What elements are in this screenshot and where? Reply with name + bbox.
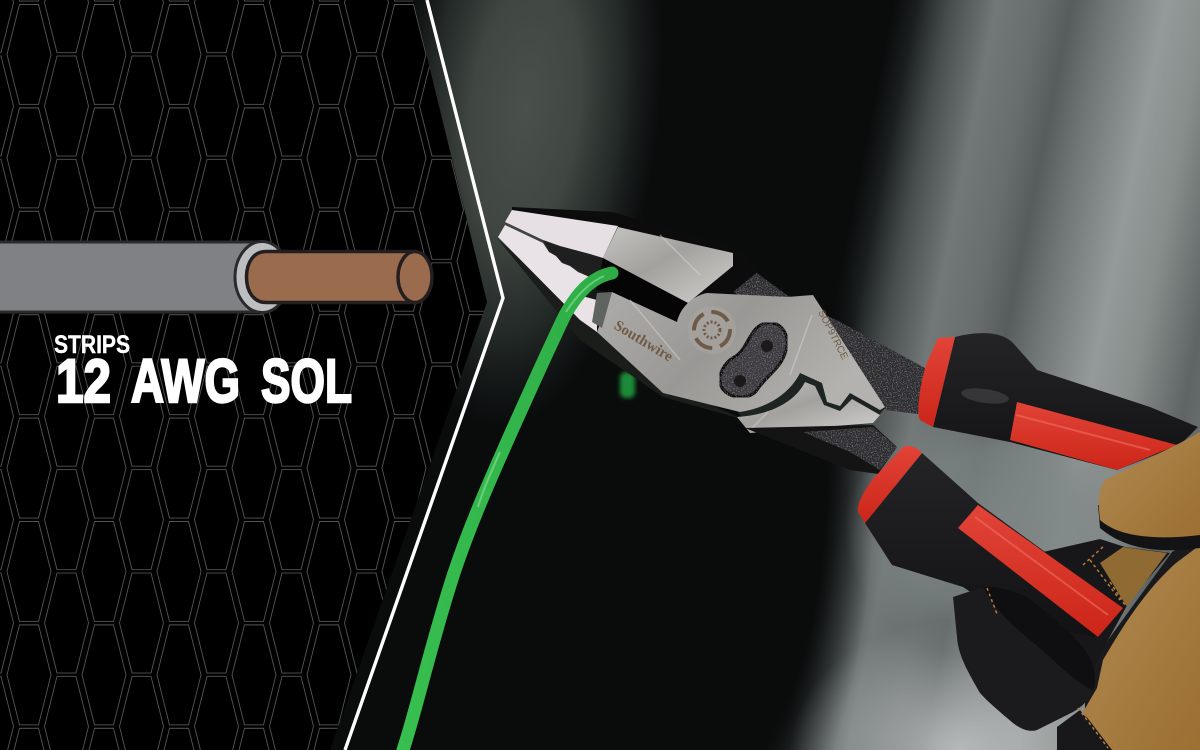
stitching — [1083, 545, 1125, 605]
conductor end — [398, 252, 432, 302]
jaw opening — [543, 240, 617, 277]
white chevron line — [345, 0, 503, 750]
main steel plate — [597, 292, 885, 412]
upper jaw spine — [512, 207, 760, 305]
lower strip highlight — [975, 517, 1108, 615]
palm shadow — [1085, 535, 1200, 750]
heading: strips label: STRIPS — [54, 331, 130, 359]
copper conductor — [246, 252, 415, 302]
upper grip — [933, 333, 1198, 470]
logo medallion — [688, 306, 736, 354]
heading: wire size: 12 — [56, 347, 111, 415]
tan thumb — [1099, 432, 1200, 537]
thumb border — [1098, 505, 1200, 550]
slot shadow on jaw — [592, 292, 612, 328]
peanut hole — [720, 323, 787, 397]
upper shank — [730, 268, 925, 414]
lower shank shadow — [745, 425, 897, 474]
upper tip — [505, 210, 618, 258]
grip sheen — [960, 386, 1010, 406]
finger fold — [983, 587, 1095, 690]
upper strip highlight — [1016, 415, 1150, 450]
lower steel plate — [737, 382, 880, 433]
photo: pliers — [497, 207, 925, 474]
lower grip — [865, 453, 1122, 637]
tan palm — [1083, 545, 1200, 750]
wire jacket — [0, 242, 264, 312]
stitching — [987, 588, 1120, 750]
jaw slot — [596, 258, 690, 326]
lower red strip — [958, 505, 1123, 637]
lower shank — [803, 427, 897, 470]
finger — [953, 587, 1095, 731]
blurred wire end behind pliers — [620, 372, 635, 398]
photo: glove back — [1043, 539, 1170, 690]
lower jaw spine — [497, 238, 745, 420]
tan back panel — [1100, 547, 1167, 607]
lower collar — [858, 446, 922, 523]
upper collar — [918, 337, 955, 427]
heading: wire size — [56, 347, 352, 415]
cuff dark — [1057, 710, 1112, 750]
upper steel plate — [603, 227, 733, 303]
steel scratches — [630, 235, 812, 430]
photo: green wire — [403, 273, 612, 750]
illustration: stripped wire — [0, 242, 432, 312]
panel: black hexagon chevron — [0, 0, 487, 750]
insulation ring — [235, 242, 289, 312]
groove backing — [735, 368, 885, 428]
rivet holes — [734, 340, 773, 387]
heading: wire size: AWG — [131, 347, 240, 415]
engraved model: SOP9TRCE — [815, 308, 850, 362]
glove back black — [1043, 539, 1170, 690]
lower tip — [498, 225, 597, 332]
engraved brand: Southwire — [611, 318, 676, 365]
photo: handles — [858, 333, 1198, 637]
photo: glove front — [953, 432, 1200, 750]
heading: wire size: SOL — [261, 347, 352, 415]
upper red strip — [1010, 402, 1177, 470]
